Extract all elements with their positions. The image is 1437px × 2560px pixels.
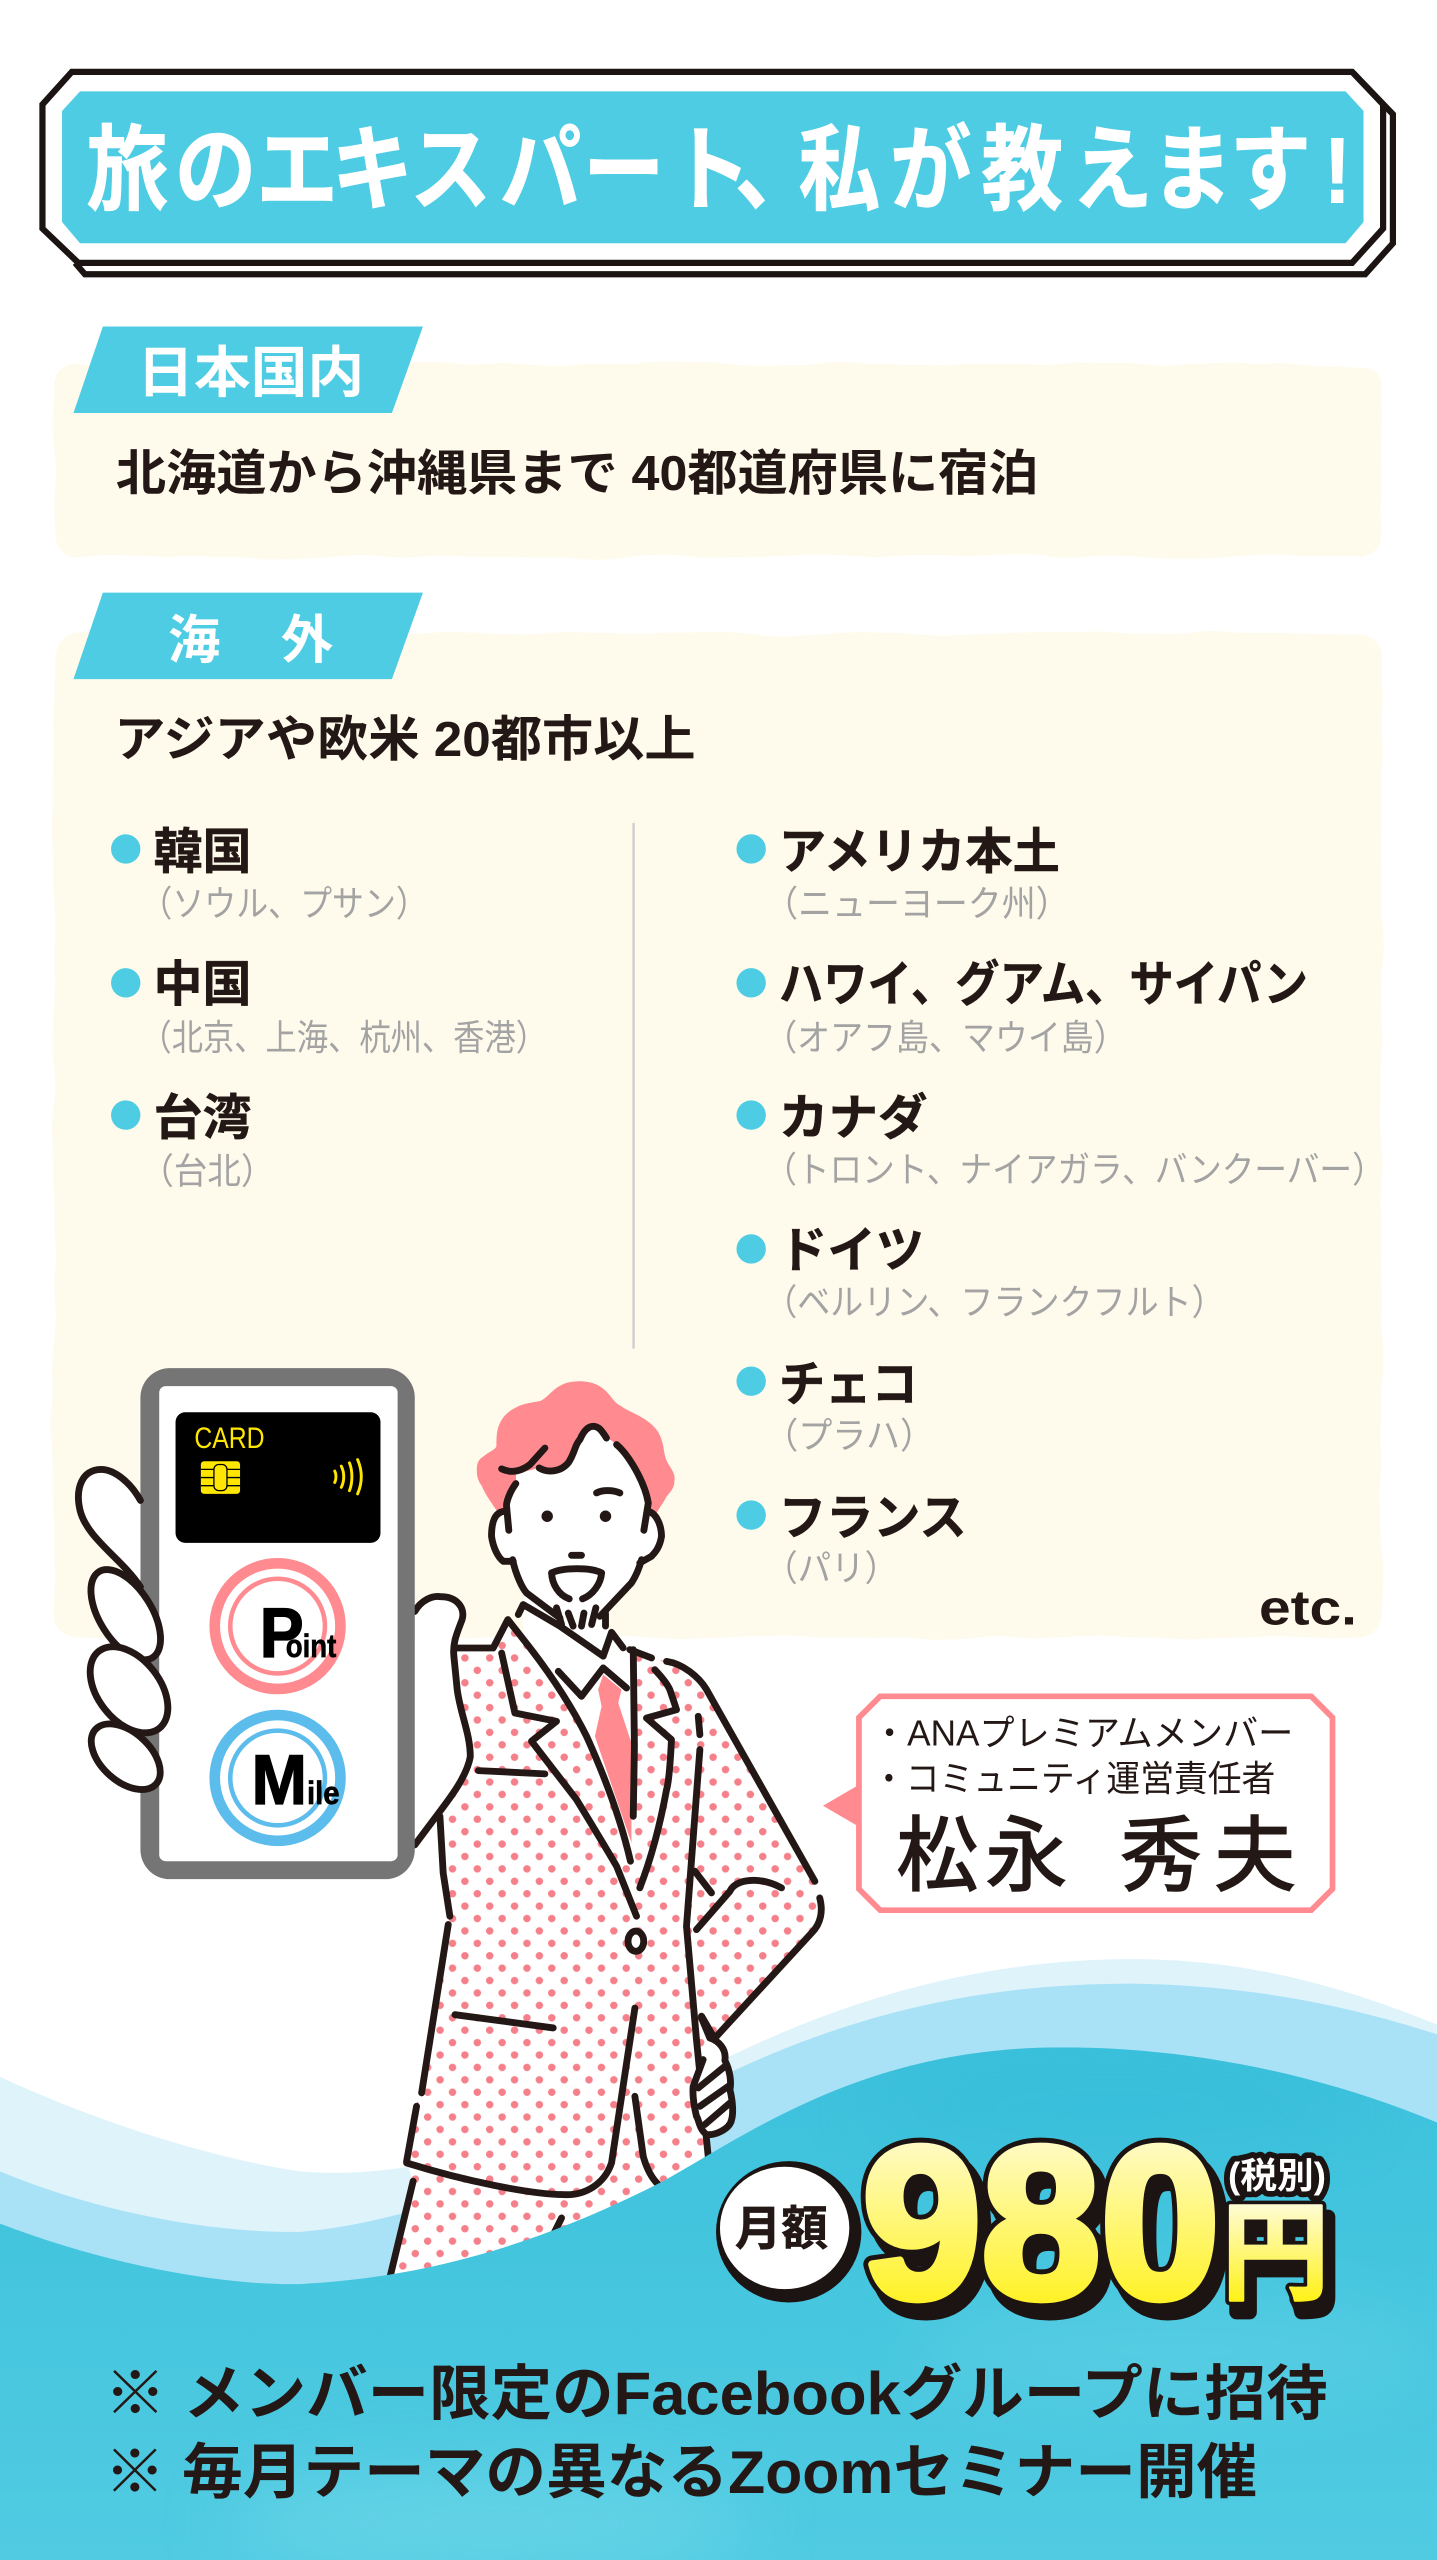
list: America and Europe: ハワイ、グアム、サイパン (779, 958, 1308, 1012)
etc label: etc. (1259, 1581, 1357, 1635)
list: America and Europe (736, 826, 1385, 1588)
tag: overseas (73, 593, 423, 679)
list: America and Europe: フランス (779, 1492, 967, 1546)
yen sign: 円 (1221, 2193, 1329, 2314)
list: America and Europe: （オアフ島、マウイ島） (764, 1017, 1127, 1058)
suit jacket and trousers (390, 1593, 821, 2318)
list: Asia: 台湾 (153, 1092, 251, 1146)
title banner (42, 72, 1393, 274)
wave: light layers (0, 1959, 1437, 2560)
point badge: oint (286, 1627, 336, 1664)
tax note: (税別) (1228, 2155, 1326, 2196)
point badge (215, 1563, 340, 1689)
list: Asia (111, 826, 547, 1192)
illustration: man in polka-dot suit (390, 1381, 821, 2318)
hand holding phone (74, 1469, 184, 1802)
monthly badge: 月額 (735, 2203, 828, 2256)
icon: contactless waves (335, 1460, 361, 1494)
price 980: 980 (862, 2102, 1220, 2343)
list: America and Europe: （プラハ） (764, 1415, 934, 1456)
list: Asia: 韓国 (153, 826, 251, 880)
list: Asia: （北京、上海、杭州、香港） (140, 1017, 547, 1058)
price block (716, 2102, 1336, 2355)
mile badge: M (251, 1740, 307, 1819)
benefits text: ※ メンバー限定のFacebookグループに招待 (105, 2360, 1328, 2428)
list: America and Europe: カナダ (779, 1092, 928, 1146)
yen sign: 円 (1221, 2193, 1329, 2314)
black card (176, 1412, 380, 1543)
domestic description: 北海道から沖縄県まで 40都道府県に宿泊 (116, 447, 1039, 501)
price 980: 980 (870, 2114, 1228, 2355)
list: America and Europe: （トロント、ナイアガラ、バンクーバー） (764, 1149, 1385, 1190)
mile badge: ile (307, 1774, 340, 1811)
price 980: 980 (862, 2102, 1220, 2343)
list: America and Europe: （パリ） (764, 1547, 898, 1588)
right hand on hip (693, 2018, 733, 2135)
benefits text (105, 2360, 1328, 2506)
list: America and Europe: チェコ (779, 1358, 918, 1412)
wave: main teal (0, 2041, 1437, 2560)
panel: overseas (54, 593, 1385, 1638)
panel: domestic (54, 327, 1381, 557)
list: Asia: 中国 (153, 958, 251, 1012)
speech bubble: profile (823, 1696, 1332, 1910)
mile badge (215, 1715, 340, 1841)
benefits text: ※ 毎月テーマの異なるZoomセミナー開催 (105, 2438, 1257, 2506)
profile roles: ・ANAプレミアムメンバー (872, 1712, 1293, 1753)
monthly badge (716, 2161, 861, 2303)
tag: overseas: 海外 (168, 612, 333, 670)
list: America and Europe: ドイツ (779, 1224, 924, 1278)
speech bubble: profile: ・コミュニティ運営責任者 (872, 1758, 1275, 1799)
profile name: 松永秀夫 (896, 1811, 1296, 1902)
icon: IC chip (201, 1461, 240, 1494)
list: America and Europe: （ニューヨーク州） (764, 883, 1070, 924)
tag: domestic (73, 327, 423, 413)
list: Asia: （ソウル、プサン） (140, 883, 428, 924)
head (477, 1381, 675, 1626)
point badge: P (260, 1593, 304, 1672)
smartphone (140, 1368, 415, 1879)
overseas description: アジアや欧米 20都市以上 (114, 713, 696, 767)
list: America and Europe: （ベルリン、フランクフルト） (764, 1281, 1225, 1322)
title text: 旅のエキスパート、私が教えます! (87, 118, 1351, 223)
yen sign: 円 (1228, 2204, 1336, 2325)
black card: CARD (194, 1422, 265, 1455)
list: America and Europe: アメリカ本土 (779, 826, 1060, 880)
list: Asia: （台北） (140, 1151, 274, 1192)
tag: domestic: 日本国内 (137, 342, 364, 404)
